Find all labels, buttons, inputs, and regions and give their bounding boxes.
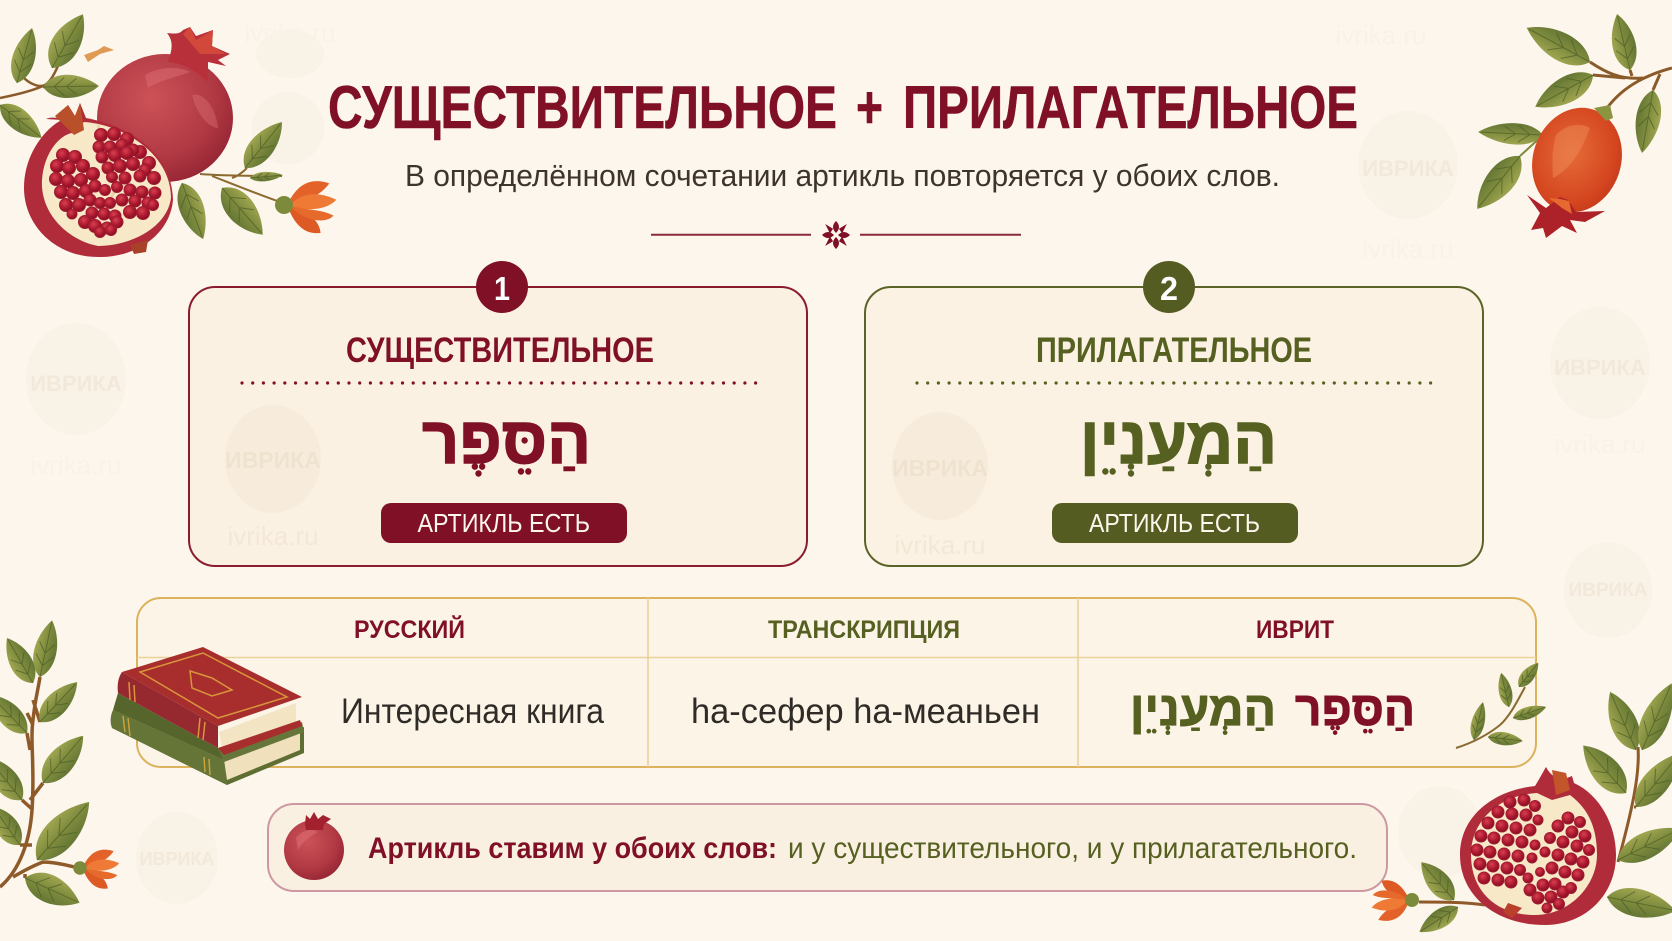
pill noun [381,503,627,543]
badge 1: 1 [494,270,510,307]
title: СУЩЕСТВИТЕЛЬНОЕ [328,74,837,141]
dotted rule adjective [917,381,1431,385]
header transcription: ТРАНСКРИПЦИЯ [768,616,960,644]
hebrew adjective: הַמְעַנְיֵן [1080,403,1277,477]
heading adjective: ПРИЛАГАТЕЛЬНОЕ [1036,331,1312,370]
table frame [137,598,1536,767]
badge 2 [1143,261,1195,313]
callout [268,804,1387,891]
callout bold text: Артикль ставим у обоих слов: [368,832,777,865]
watermarks: ИВРИКА [1362,156,1454,181]
watermarks: ИВРИКА [1568,580,1648,601]
header hebrew: ИВРИТ [1256,616,1334,644]
panel: adjective [865,261,1483,566]
pill adjective [1052,503,1298,543]
badge 2: 2 [1160,270,1178,307]
subtitle: В определённом сочетании артикль повторяется у обоих слов. [405,158,1280,193]
decoration: bottom-right pomegranate [1371,678,1672,940]
cell hebrew adjective: הַמְעַנְיֵן [1130,683,1276,736]
table [137,598,1548,767]
watermark logo in noun panel: ivrika.ru [227,521,319,551]
table grid [137,598,1536,767]
panel frame adjective [865,287,1483,566]
divider with flower [651,221,1021,249]
cell russian: Интересная книга [341,692,604,731]
icon: small sprig [1456,659,1548,748]
panel frame noun [189,287,807,566]
heading noun: СУЩЕСТВИТЕЛЬНОЕ [346,331,654,370]
hebrew noun: הַסֵּפֶר [422,403,591,477]
icon: books [111,647,304,785]
dotted rule noun [242,381,756,385]
cell transcription: ha-сефер ha-меаньен [691,692,1040,731]
watermarks: ivrika.ru [1362,234,1454,264]
icon: pomegranate [284,812,344,880]
header russian: РУССКИЙ [354,614,465,644]
watermark logo in noun panel [225,405,321,551]
watermark logo in adjective panel: ivrika.ru [894,530,986,560]
callout frame [268,804,1387,891]
watermarks: ivrika.ru [1335,20,1427,50]
title [328,74,1358,141]
pill noun: АРТИКЛЬ ЕСТЬ [418,508,590,538]
cell hebrew noun: הַסֵּפֶר [1295,683,1415,736]
watermarks: ИВРИКА [140,849,214,869]
title: ПРИЛАГАТЕЛЬНОЕ [903,74,1358,141]
panel: noun [189,261,807,566]
watermarks: ИВРИКА [1554,355,1646,380]
watermarks: ИВРИКА [30,371,122,396]
watermarks: ivrika.ru [244,18,336,48]
callout regular text: и у существительного, и у прилагательного. [788,832,1357,865]
decoration: top-right branch with fruit [1467,11,1672,238]
watermark logo in adjective panel [892,412,988,560]
decoration: top-left pomegranates [0,7,337,257]
badge 1 [476,261,528,313]
pill adjective: АРТИКЛЬ ЕСТЬ [1089,508,1260,538]
title: + [856,74,883,141]
watermarks: ivrika.ru [1554,429,1646,459]
watermark logo in adjective panel: ИВРИКА [892,455,988,481]
decoration: bottom-left branch [0,618,120,915]
watermarks: ivrika.ru [30,450,122,480]
watermark logo in noun panel: ИВРИКА [225,447,321,473]
